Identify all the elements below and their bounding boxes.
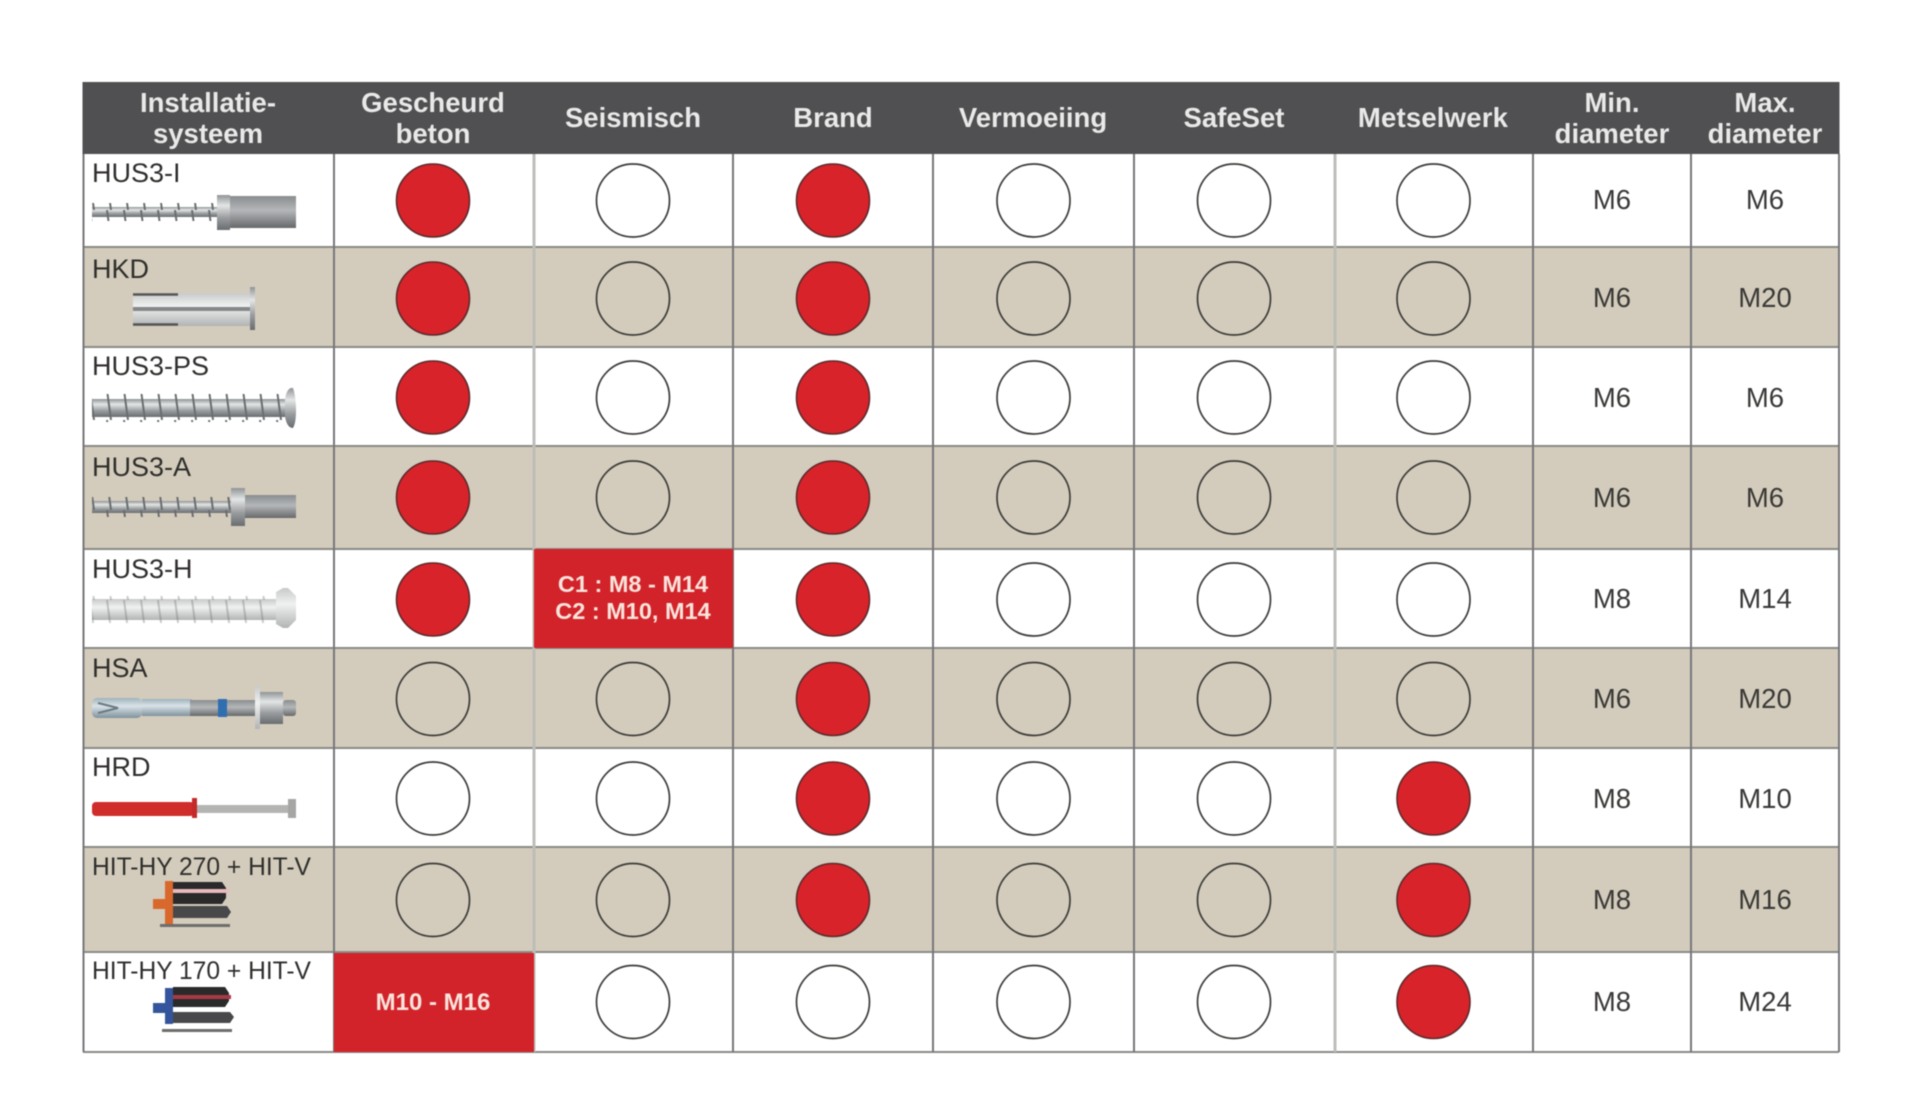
header: Installatie-systeem: Installatie- — [140, 87, 276, 118]
header: SafeSet: SafeSet — [1184, 102, 1284, 133]
icon: HKD anchor — [133, 287, 255, 330]
row: HRD — [92, 752, 1792, 835]
max diameter: M6 — [1746, 482, 1784, 513]
min diameter: M6 — [1593, 683, 1631, 714]
max diameter: M16 — [1738, 884, 1792, 915]
row: HSA — [92, 653, 1792, 736]
status dots — [596, 966, 1470, 1038]
red cell: cracked concrete M10 - M16: M10 - M16 — [376, 989, 490, 1016]
header: Installatie-systeem: systeem — [153, 118, 263, 149]
status dots — [396, 762, 1470, 835]
row: HUS3-I — [92, 158, 1784, 237]
row: HUS3-H — [92, 549, 1792, 648]
name: HUS3-A — [92, 452, 191, 482]
status dots — [396, 563, 1470, 636]
max diameter: M6 — [1746, 382, 1784, 413]
header: Max. diameter: Max. — [1734, 87, 1796, 118]
icon: HRD plug — [92, 798, 296, 818]
max diameter: M24 — [1738, 986, 1792, 1017]
max diameter: M10 — [1738, 783, 1792, 814]
icon: HUS3-PS screw — [92, 388, 296, 428]
header: Gescheurd beton: beton — [396, 118, 470, 149]
header: Seismisch: Seismisch — [565, 102, 701, 133]
row: HIT-HY 270 + HIT-V — [92, 854, 1792, 936]
red cell: seismic C1 C2 — [534, 549, 733, 648]
status dots — [396, 864, 1470, 936]
name: HSA — [92, 653, 148, 683]
status dots — [396, 262, 1470, 335]
status dots — [396, 164, 1470, 237]
name: HIT-HY 170 + HIT-V — [92, 958, 312, 985]
name: HUS3-I — [92, 158, 181, 188]
header: Min. diameter: Min. — [1584, 87, 1640, 118]
min diameter: M8 — [1593, 583, 1631, 614]
header: Vermoeiing: Vermoeiing — [959, 102, 1107, 133]
red cell: cracked concrete M10 - M16 — [334, 953, 534, 1052]
header: Brand: Brand — [793, 102, 873, 133]
icon: HUS3-I anchor — [92, 195, 296, 230]
header: Gescheurd beton: Gescheurd — [361, 87, 505, 118]
status dots — [396, 662, 1470, 736]
header: Max. diameter: diameter — [1708, 118, 1823, 149]
status dots — [396, 461, 1470, 534]
icon: HUS3-A screw — [92, 488, 296, 526]
name: HUS3-H — [92, 554, 193, 584]
row background bands — [83, 247, 1839, 952]
min diameter: M6 — [1593, 382, 1631, 413]
row: HIT-HY 170 + HIT-V — [92, 953, 1792, 1052]
max diameter: M6 — [1746, 184, 1784, 215]
status dots — [396, 361, 1470, 434]
row: HKD — [92, 254, 1792, 335]
icon: HUS3-H screw — [92, 588, 296, 628]
icon: blue injection cartridge — [153, 987, 234, 1032]
red cell: seismic C1 C2: C1 : M8 - M14 — [558, 571, 708, 597]
red cell: seismic C1 C2: C2 : M10, M14 — [555, 598, 711, 624]
min diameter: M8 — [1593, 884, 1631, 915]
row: HUS3-A — [92, 452, 1784, 534]
icon: HSA anchor — [92, 686, 296, 729]
name: HRD — [92, 752, 150, 782]
min diameter: M6 — [1593, 482, 1631, 513]
max diameter: M20 — [1738, 282, 1792, 313]
min diameter: M6 — [1593, 282, 1631, 313]
min diameter: M8 — [1593, 783, 1631, 814]
name: HKD — [92, 254, 149, 284]
icon: orange injection cartridge — [153, 881, 231, 927]
row: HUS3-PS — [92, 351, 1784, 434]
max diameter: M14 — [1738, 583, 1792, 614]
min diameter: M8 — [1593, 986, 1631, 1017]
name: HUS3-PS — [92, 351, 209, 381]
header: Metselwerk: Metselwerk — [1358, 102, 1509, 133]
name: HIT-HY 270 + HIT-V — [92, 854, 312, 881]
header row — [82, 82, 1840, 154]
max diameter: M20 — [1738, 683, 1792, 714]
min diameter: M6 — [1593, 184, 1631, 215]
header: Min. diameter: diameter — [1555, 118, 1670, 149]
